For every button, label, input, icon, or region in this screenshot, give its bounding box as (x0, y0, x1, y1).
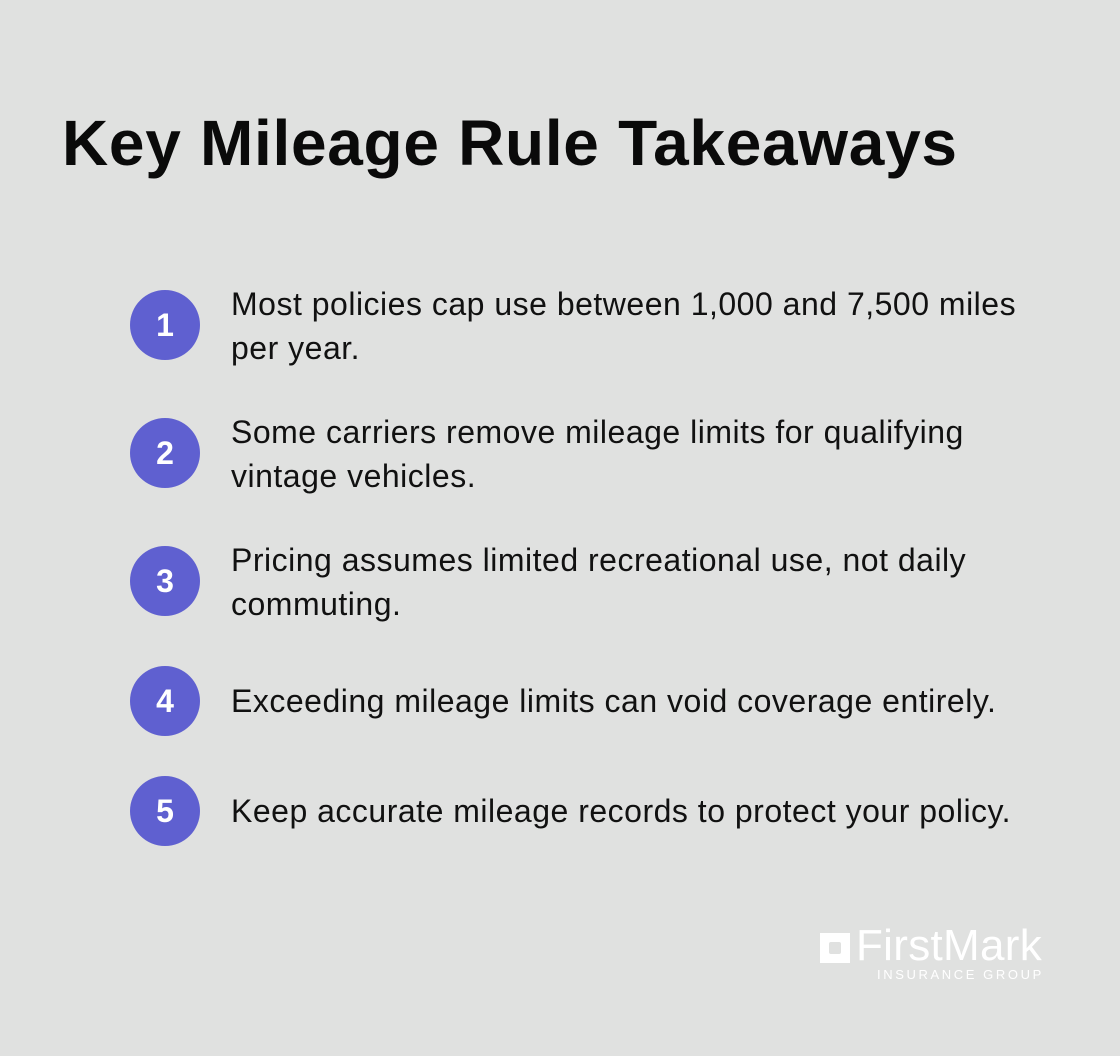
circle 4 (130, 666, 200, 736)
title: Key Mileage Rule Takeaways (62, 107, 958, 179)
text 3: commuting. (231, 586, 401, 622)
circle 3: 3 (156, 563, 174, 599)
circle 5 (130, 776, 200, 846)
circle 2: 2 (156, 435, 174, 471)
text 1: per year. (231, 330, 360, 366)
circle 5: 5 (156, 793, 174, 829)
circle 1 (130, 290, 200, 360)
text 1: Most policies cap use between 1,000 and 7,500 miles (231, 286, 1016, 322)
logo (820, 921, 1044, 982)
logo: FirstMark (856, 921, 1042, 970)
text 1 (231, 286, 1016, 366)
text 3 (231, 542, 966, 622)
circle 2 (130, 418, 200, 488)
text 2: vintage vehicles. (231, 458, 476, 494)
circle 3 (130, 546, 200, 616)
logo: INSURANCE GROUP (877, 967, 1044, 982)
circle 1: 1 (156, 307, 174, 343)
text 5: Keep accurate mileage records to protect your policy. (231, 793, 1011, 829)
circle 4: 4 (156, 683, 174, 719)
text 2 (231, 414, 964, 494)
text 2: Some carriers remove mileage limits for qualifying (231, 414, 964, 450)
text 4: Exceeding mileage limits can void coverage entirely. (231, 683, 996, 719)
text 3: Pricing assumes limited recreational use, not daily (231, 542, 966, 578)
